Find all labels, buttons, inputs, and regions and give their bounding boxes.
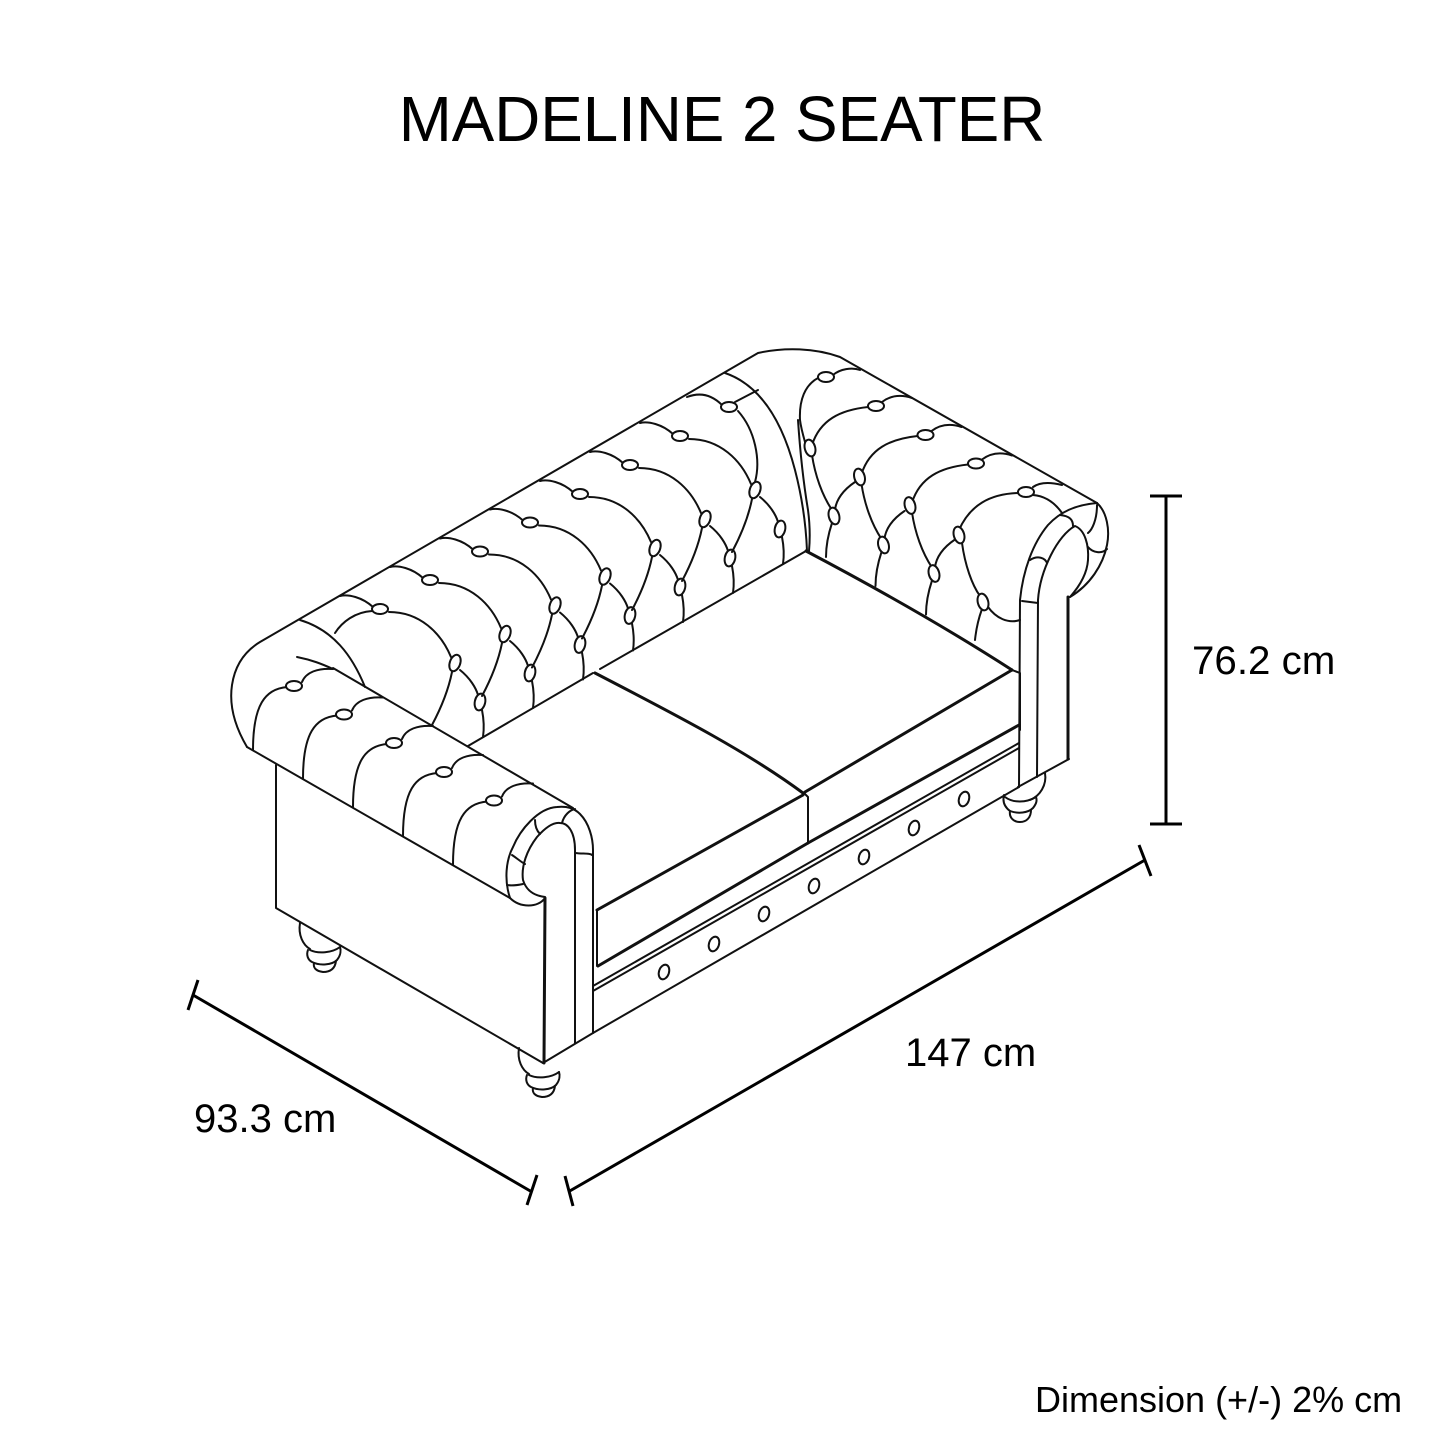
title: MADELINE 2 SEATER <box>399 84 1045 155</box>
side panel <box>276 765 593 1063</box>
rear right foot <box>1003 773 1045 822</box>
front arm <box>247 668 573 898</box>
back tufting <box>340 395 787 737</box>
label: width: 147 cm <box>905 1031 1036 1075</box>
right arm scroll <box>1018 503 1108 787</box>
front arm scroll <box>506 807 593 1043</box>
right arm tufting <box>800 369 1062 640</box>
seat cushions <box>468 551 1020 991</box>
label: height: 76.2 cm <box>1192 638 1335 683</box>
front corner foot <box>519 1048 560 1097</box>
dimension: width <box>565 845 1151 1206</box>
tolerance note: Dimension (+/-) 2% cm <box>1035 1379 1402 1420</box>
back outline <box>231 349 1097 747</box>
dimension: height <box>1150 496 1335 824</box>
front rail <box>593 787 1019 1033</box>
sofa line drawing <box>231 349 1108 1097</box>
label: depth: 93.3 cm <box>194 1097 336 1141</box>
rear left foot <box>300 923 341 972</box>
dimension: depth <box>188 980 537 1205</box>
